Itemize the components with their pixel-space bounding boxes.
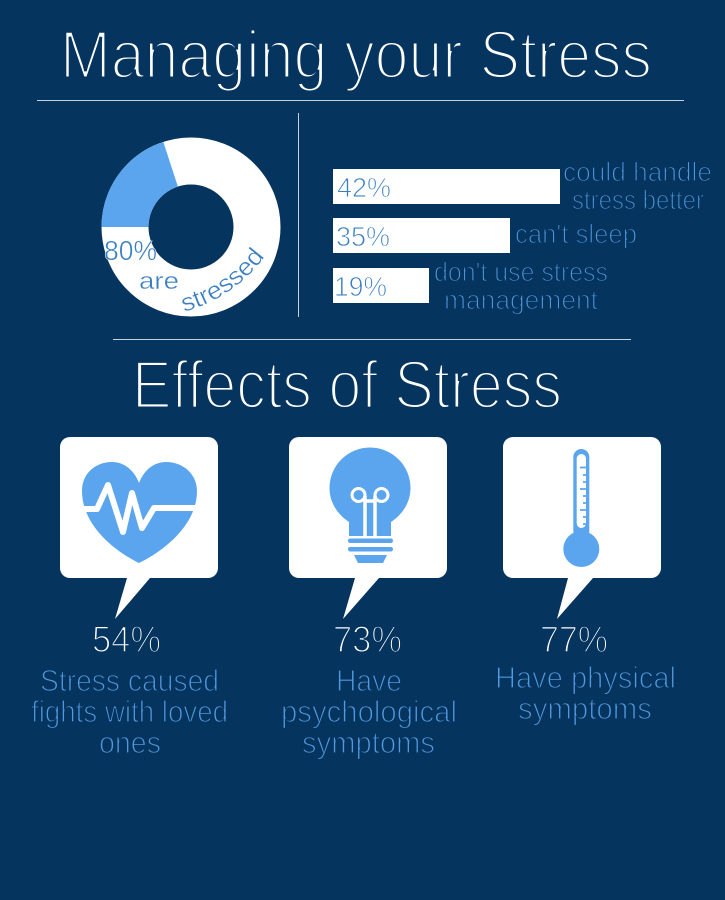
stat: 73%: 73% — [333, 619, 402, 660]
text: stress caused fights with loved ones: ones — [99, 725, 161, 760]
icon: heart with pulse — [82, 462, 198, 563]
bar 19% — [333, 268, 429, 303]
title: Managing your Stress — [60, 17, 652, 93]
panel: donut chart — [102, 138, 280, 316]
icon: thermometer — [563, 449, 599, 567]
label: could handle stress better: could handle — [563, 157, 712, 187]
text: have physical symptoms: symptoms — [518, 691, 652, 726]
label: 80%: 80% — [104, 235, 157, 266]
text: have psychological symptoms: symptoms — [302, 725, 435, 760]
label: don't use stress management: don't use stress — [434, 257, 608, 287]
bar 42%: 42% — [337, 172, 391, 203]
text: have physical symptoms: Have physical — [495, 660, 676, 695]
text: stress caused fights with loved ones — [31, 663, 228, 760]
text: stress caused fights with loved ones: Stress caused — [40, 663, 219, 698]
speech bubble — [503, 437, 661, 619]
label: stressed: stressed — [182, 246, 264, 311]
panel: bar chart — [333, 157, 712, 315]
donut 20% segment — [102, 142, 178, 227]
bar 35% — [333, 218, 510, 253]
label: are: are — [139, 268, 179, 295]
text: stress caused fights with loved ones: fights with loved — [31, 694, 228, 729]
label: can't sleep: can't sleep — [515, 219, 637, 249]
text: have psychological symptoms: psychological — [281, 694, 457, 729]
panel: lightbulb effect — [281, 437, 457, 760]
donut ring — [125, 161, 257, 293]
label: could handle stress better — [563, 157, 712, 215]
bar 35%: 35% — [336, 221, 390, 252]
speech bubble — [60, 437, 218, 619]
stat: 77%: 77% — [540, 619, 608, 660]
text: have physical symptoms — [495, 660, 676, 726]
bar 42% — [333, 169, 560, 204]
speech bubble — [289, 437, 447, 619]
stat: 54%: 54% — [92, 619, 161, 660]
panel: thermometer effect — [495, 437, 676, 726]
text: have psychological symptoms: Have — [336, 663, 402, 698]
text: have psychological symptoms — [281, 663, 457, 760]
label: don't use stress management: management — [444, 285, 598, 315]
label: don't use stress management — [434, 257, 608, 315]
heading: effects of stress: Effects of Stress — [132, 347, 562, 423]
panel: heart effect — [31, 437, 228, 760]
label: could handle stress better: stress better — [572, 185, 704, 215]
icon: lightbulb — [330, 448, 410, 563]
bar 19%: 19% — [334, 271, 387, 302]
